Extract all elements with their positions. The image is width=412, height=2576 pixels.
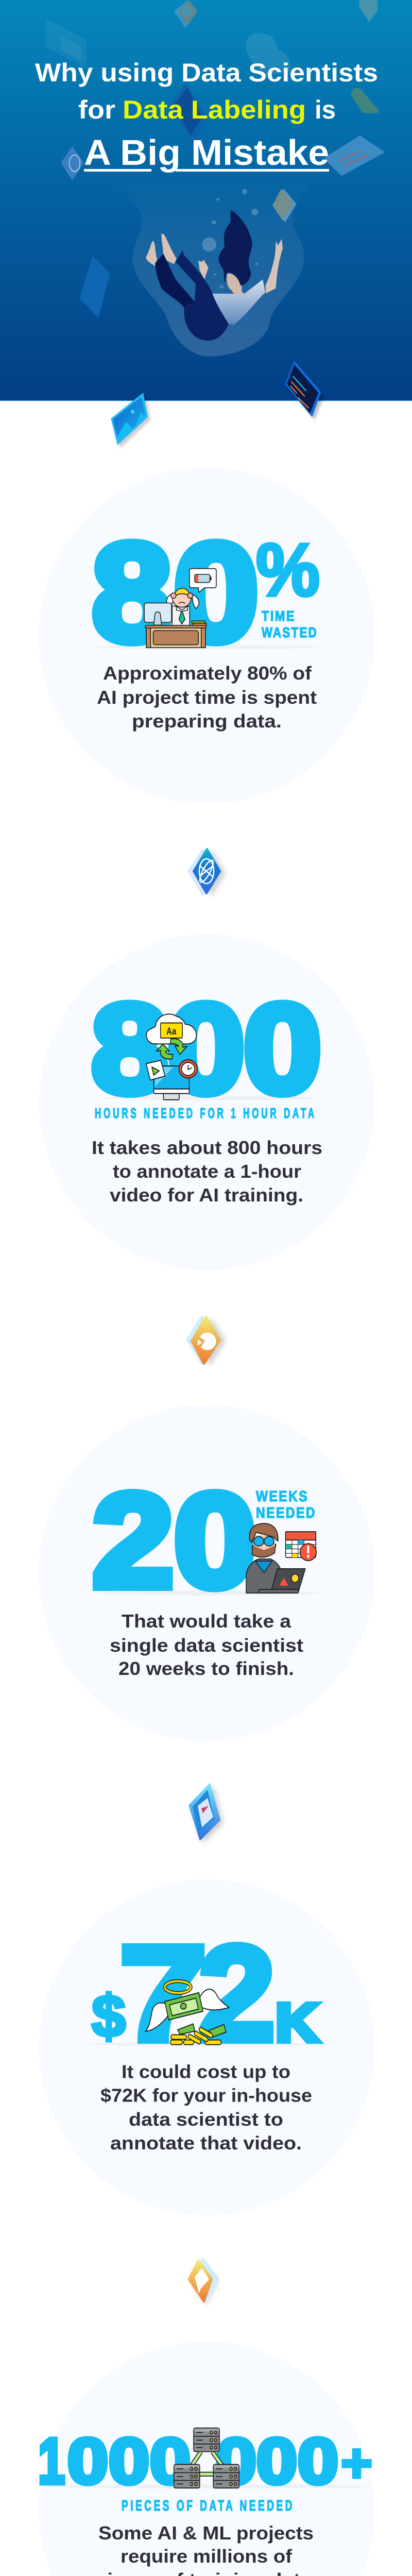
text: $72K statement: data scientist to [129,2109,283,2130]
label: pieces of data needed: PIECES OF DATA NEEDED [122,2498,295,2514]
big number $72K: 2 [199,1918,275,2069]
big number 800: 0 [167,978,245,1119]
icon: tablet video card [188,1783,224,1843]
circle background [39,1879,375,2215]
floating faded data objects [46,0,385,318]
panel: 80% stat [39,467,375,804]
text: 800 hours statement: to annotate a 1-hour [113,1161,301,1182]
big number 800 [92,978,321,1119]
ground shadow [96,645,318,649]
panel: 20 weeks stat [39,1404,375,1741]
label: weeks needed [256,1488,316,1521]
illustration: stressed worker at desk [144,569,216,648]
icon: chat diamond [188,2259,218,2306]
title: for [78,95,115,124]
big number $72K: 7 [119,1918,207,2069]
big number 1000000+: 0 [109,2426,149,2497]
text: 80% statement: AI project time is spent [97,687,317,708]
title [35,58,378,173]
label: time wasted: TIME [262,608,296,624]
illustration: linked servers [174,2428,239,2488]
big number 80%: % [256,528,320,612]
text: $72K statement: annotate that video. [110,2132,302,2154]
text: 800 hours statement: video for AI training. [110,1184,303,1206]
big number 80%: 8 [92,515,172,670]
big number 1000000+: + [341,2433,372,2494]
big number 1000000+: 0 [256,2426,297,2497]
text: $72K statement: $72K for your in-house [100,2084,312,2106]
ground shadow [90,2042,324,2046]
label: time wasted: WASTED [262,624,318,640]
text: 20 weeks statement [110,1611,303,1679]
icon: globe diamond [189,849,226,896]
text: $72K statement: It could cost up to [122,2061,290,2082]
title: A Big Mistake [84,132,329,173]
icon: orange play diamond [187,1316,226,1366]
circle background [39,1404,375,1741]
illustration: cloud, video and clock: Aa [166,1025,177,1037]
panel: 1,000,000+ stat [38,2342,375,2576]
text: 80% statement [97,663,317,732]
big number 1000000+: 0 [298,2426,338,2497]
ground shadow [94,1591,320,1595]
text: 800 hours statement [92,1137,322,1206]
illustration: data scientist with laptop [246,1523,305,1593]
text: $72K statement [100,2061,312,2154]
blob behind woman [113,175,314,357]
big number 1000000+: 0 [150,2426,191,2497]
big number 20: 2 [93,1466,174,1615]
title: is [315,95,336,124]
panel: hero header [0,0,412,401]
text: 800 hours statement: It takes about 800 hours [92,1137,322,1158]
text: 20 weeks statement: That would take a [122,1611,291,1632]
text: training data statement [95,2522,317,2576]
circle background [39,935,375,1270]
icon: code panel card [285,361,324,420]
circle background [39,467,375,804]
big number $72K [92,1918,319,2069]
ground shadow [103,1095,316,1100]
big number 1000000+: 0 [216,2426,256,2497]
text: training data statement: require millions of [121,2546,293,2567]
circle background [39,2342,375,2576]
panel: $72K stat [39,1879,375,2215]
title: Why using Data Scientists [35,58,378,87]
big number 800: 0 [244,978,321,1119]
big number 1000000+: 1 [38,2426,65,2497]
text: 20 weeks statement: 20 weeks to finish. [118,1658,294,1679]
label: weeks needed: WEEKS [256,1488,308,1505]
big number 800: 8 [92,978,168,1119]
big number 20: 0 [174,1466,256,1615]
illustration: money with wings [145,1981,229,2045]
icon: image card [111,393,150,448]
bubbles [202,189,259,289]
icon: calendar alert [286,1532,316,1561]
big number 1000000+ [38,2426,372,2497]
big number 80%: 0 [174,515,259,670]
label: time wasted [262,608,318,640]
title: Data Labeling [123,95,306,124]
ground shadow [43,2484,373,2488]
hero illustration [46,0,385,357]
text: 80% statement: preparing data. [132,710,282,732]
big number $72K: K [276,1993,319,2053]
text: 20 weeks statement: single data scientist [110,1635,303,1656]
big number $72K: $ [92,1984,126,2049]
text: 80% statement: Approximately 80% of [103,663,312,684]
panel: 800 hours stat [39,935,375,1270]
falling woman [146,210,283,341]
header background [0,0,412,401]
label: weeks needed: NEEDED [256,1505,316,1521]
big number 1000000+: 0 [67,2426,108,2497]
big number 80% [92,515,320,670]
text: training data statement: Some AI & ML projects [98,2522,314,2544]
big number 20 [93,1466,256,1615]
illustration: cloud, video and clock [146,1014,197,1100]
